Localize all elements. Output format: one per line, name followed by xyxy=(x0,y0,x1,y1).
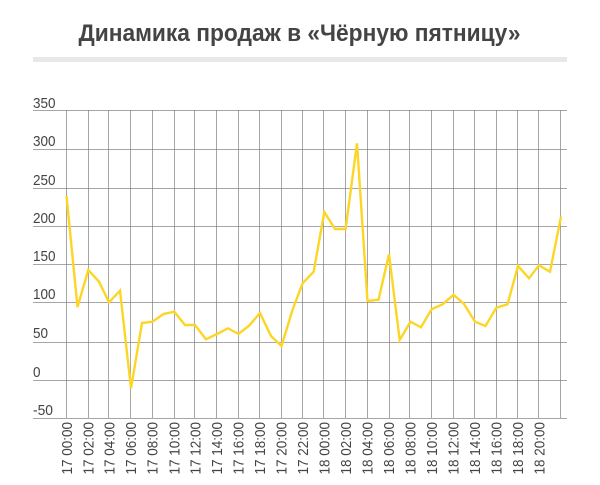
x axis labels: 17 12:00 xyxy=(188,422,204,474)
x axis labels: 18 00:00 xyxy=(316,422,334,474)
y axis labels xyxy=(33,95,56,419)
x axis labels xyxy=(59,422,548,474)
x axis labels: 18 20:00 xyxy=(532,422,548,474)
y axis labels: 0 xyxy=(33,364,40,381)
x axis labels: 17 10:00 xyxy=(166,422,184,474)
title underline bar xyxy=(33,57,567,62)
y axis labels: 300 xyxy=(33,133,56,150)
x axis labels: 17 22:00 xyxy=(295,422,312,474)
x axis labels: 17 16:00 xyxy=(230,422,248,474)
x axis labels: 18 14:00 xyxy=(467,422,484,474)
x axis labels: 17 02:00 xyxy=(80,422,98,474)
y axis labels: 200 xyxy=(33,210,56,227)
horizontal grid lines xyxy=(33,110,567,418)
x axis labels: 18 02:00 xyxy=(338,422,355,474)
y axis labels: 50 xyxy=(33,325,48,342)
x axis labels: 18 16:00 xyxy=(488,422,506,474)
x axis labels: 17 20:00 xyxy=(274,422,290,474)
y axis labels: 350 xyxy=(33,95,56,112)
title: Динамика продаж в «Чёрную пятницу» xyxy=(78,20,520,47)
x axis labels: 17 14:00 xyxy=(209,422,226,474)
sales data line xyxy=(66,143,561,388)
x axis labels: 17 00:00 xyxy=(59,422,76,474)
x axis labels: 17 04:00 xyxy=(102,422,118,474)
x axis labels: 17 06:00 xyxy=(123,422,140,474)
y axis labels: -50 xyxy=(33,402,53,419)
x axis labels: 18 04:00 xyxy=(360,422,376,474)
y axis labels: 250 xyxy=(33,172,56,189)
x axis labels: 18 12:00 xyxy=(446,422,462,474)
y axis labels: 100 xyxy=(33,286,56,303)
x axis labels: 18 10:00 xyxy=(424,422,441,474)
x axis labels: 17 18:00 xyxy=(252,422,269,474)
vertical grid lines xyxy=(66,110,560,418)
y axis labels: 150 xyxy=(33,248,56,265)
line chart xyxy=(33,95,567,474)
x axis labels: 17 08:00 xyxy=(144,422,162,474)
x axis labels: 18 08:00 xyxy=(402,422,420,474)
x axis labels: 18 06:00 xyxy=(381,422,398,474)
x axis labels: 18 18:00 xyxy=(510,422,527,474)
